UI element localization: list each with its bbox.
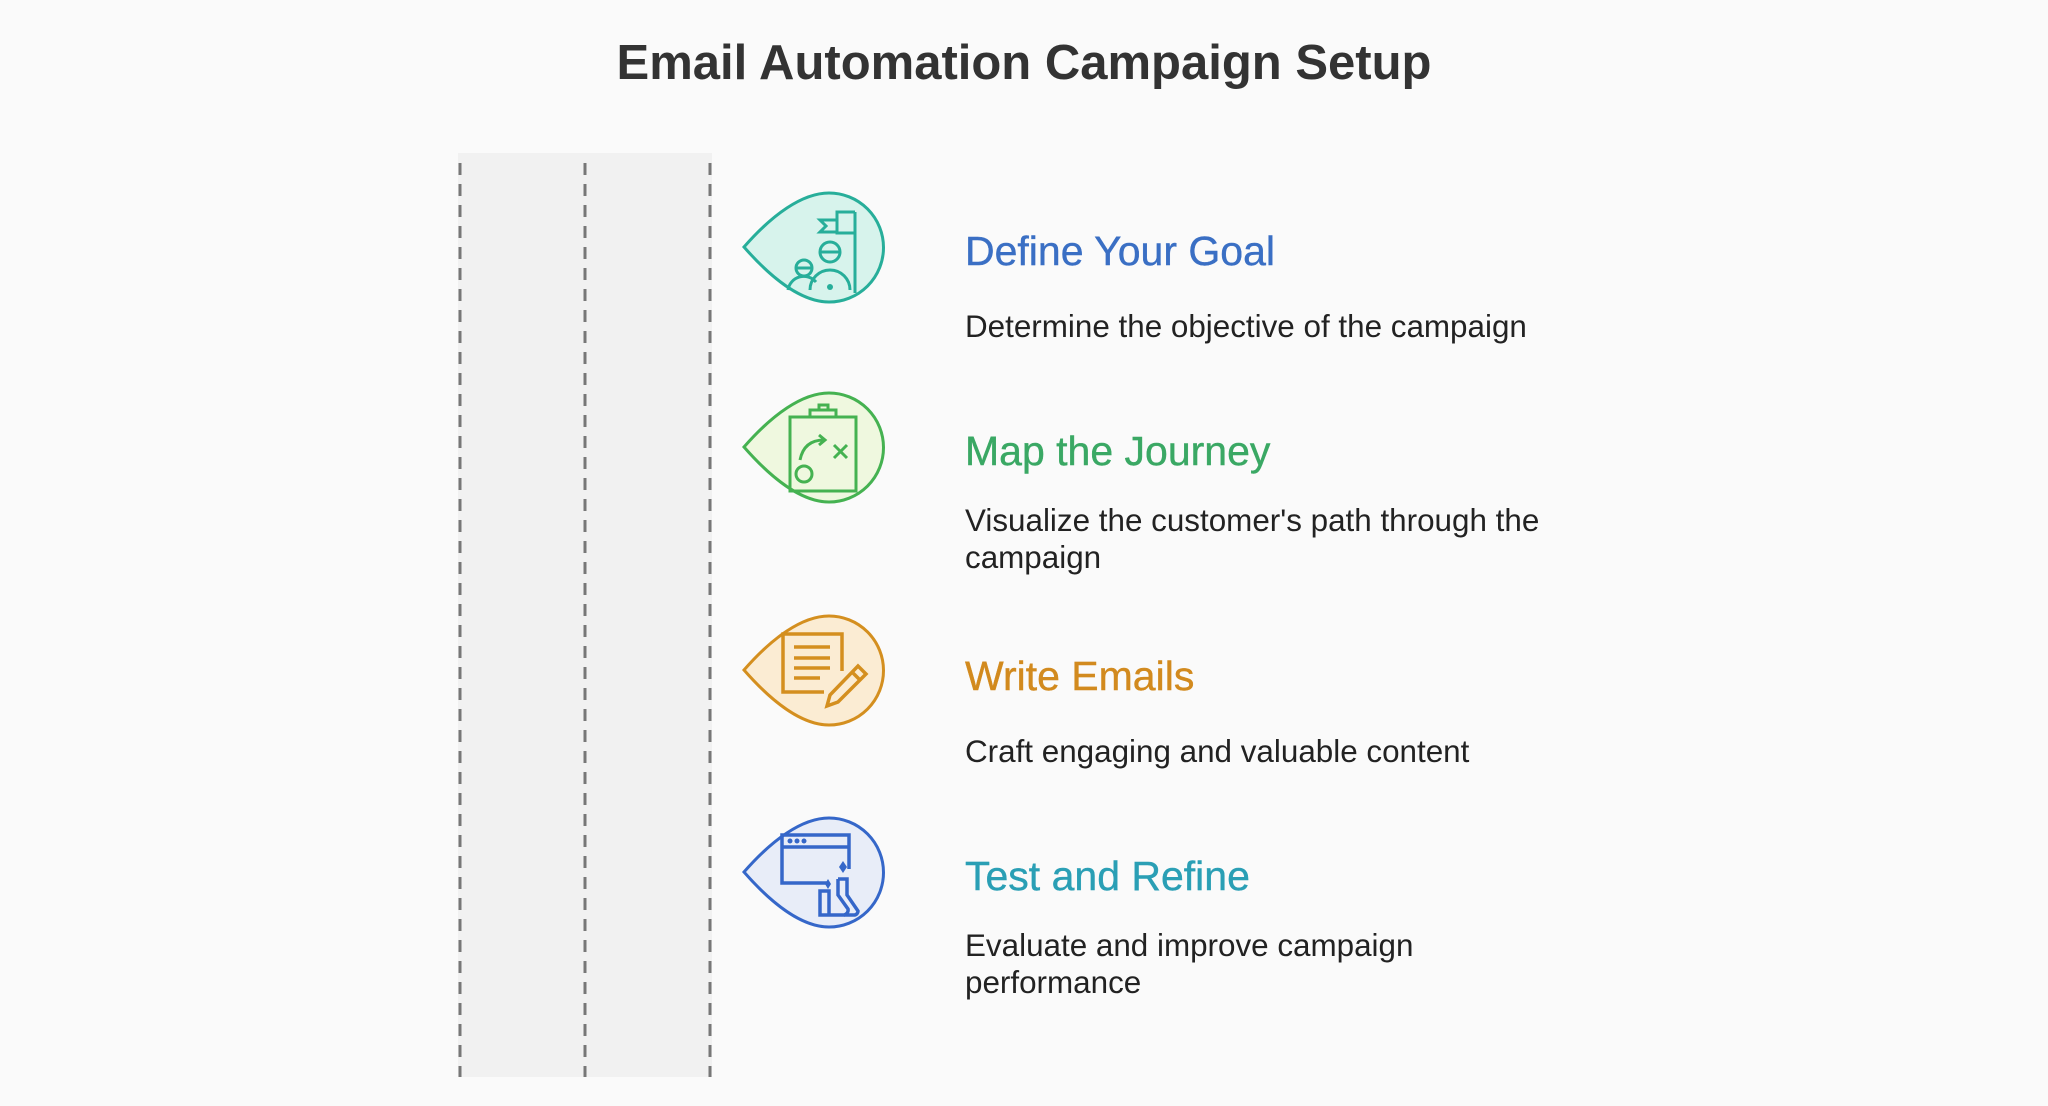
icon: goal (people with flag) [742, 192, 885, 304]
title: Email Automation Campaign Setup [617, 36, 1431, 90]
text: goal description: Determine the objective of the campaign [965, 309, 1527, 344]
text: write description: Craft engaging and valuable content [965, 734, 1469, 769]
heading: Define Your Goal: Define Your Goal [965, 228, 1275, 274]
text: journey description: Visualize the customer's path through the campaign [965, 503, 1539, 575]
icon: write emails (document with pencil) [742, 614, 885, 726]
panel: lane background with dashed lines [458, 153, 712, 1077]
heading: Write Emails: Write Emails [965, 653, 1194, 699]
text: test description: Evaluate and improve campaign performance [965, 928, 1413, 1000]
icon: test (browser window with flask) [742, 816, 885, 928]
heading: Test and Refine: Test and Refine [965, 853, 1250, 899]
icon: journey (clipboard) [742, 392, 885, 504]
heading: Map the Journey: Map the Journey [965, 428, 1270, 474]
